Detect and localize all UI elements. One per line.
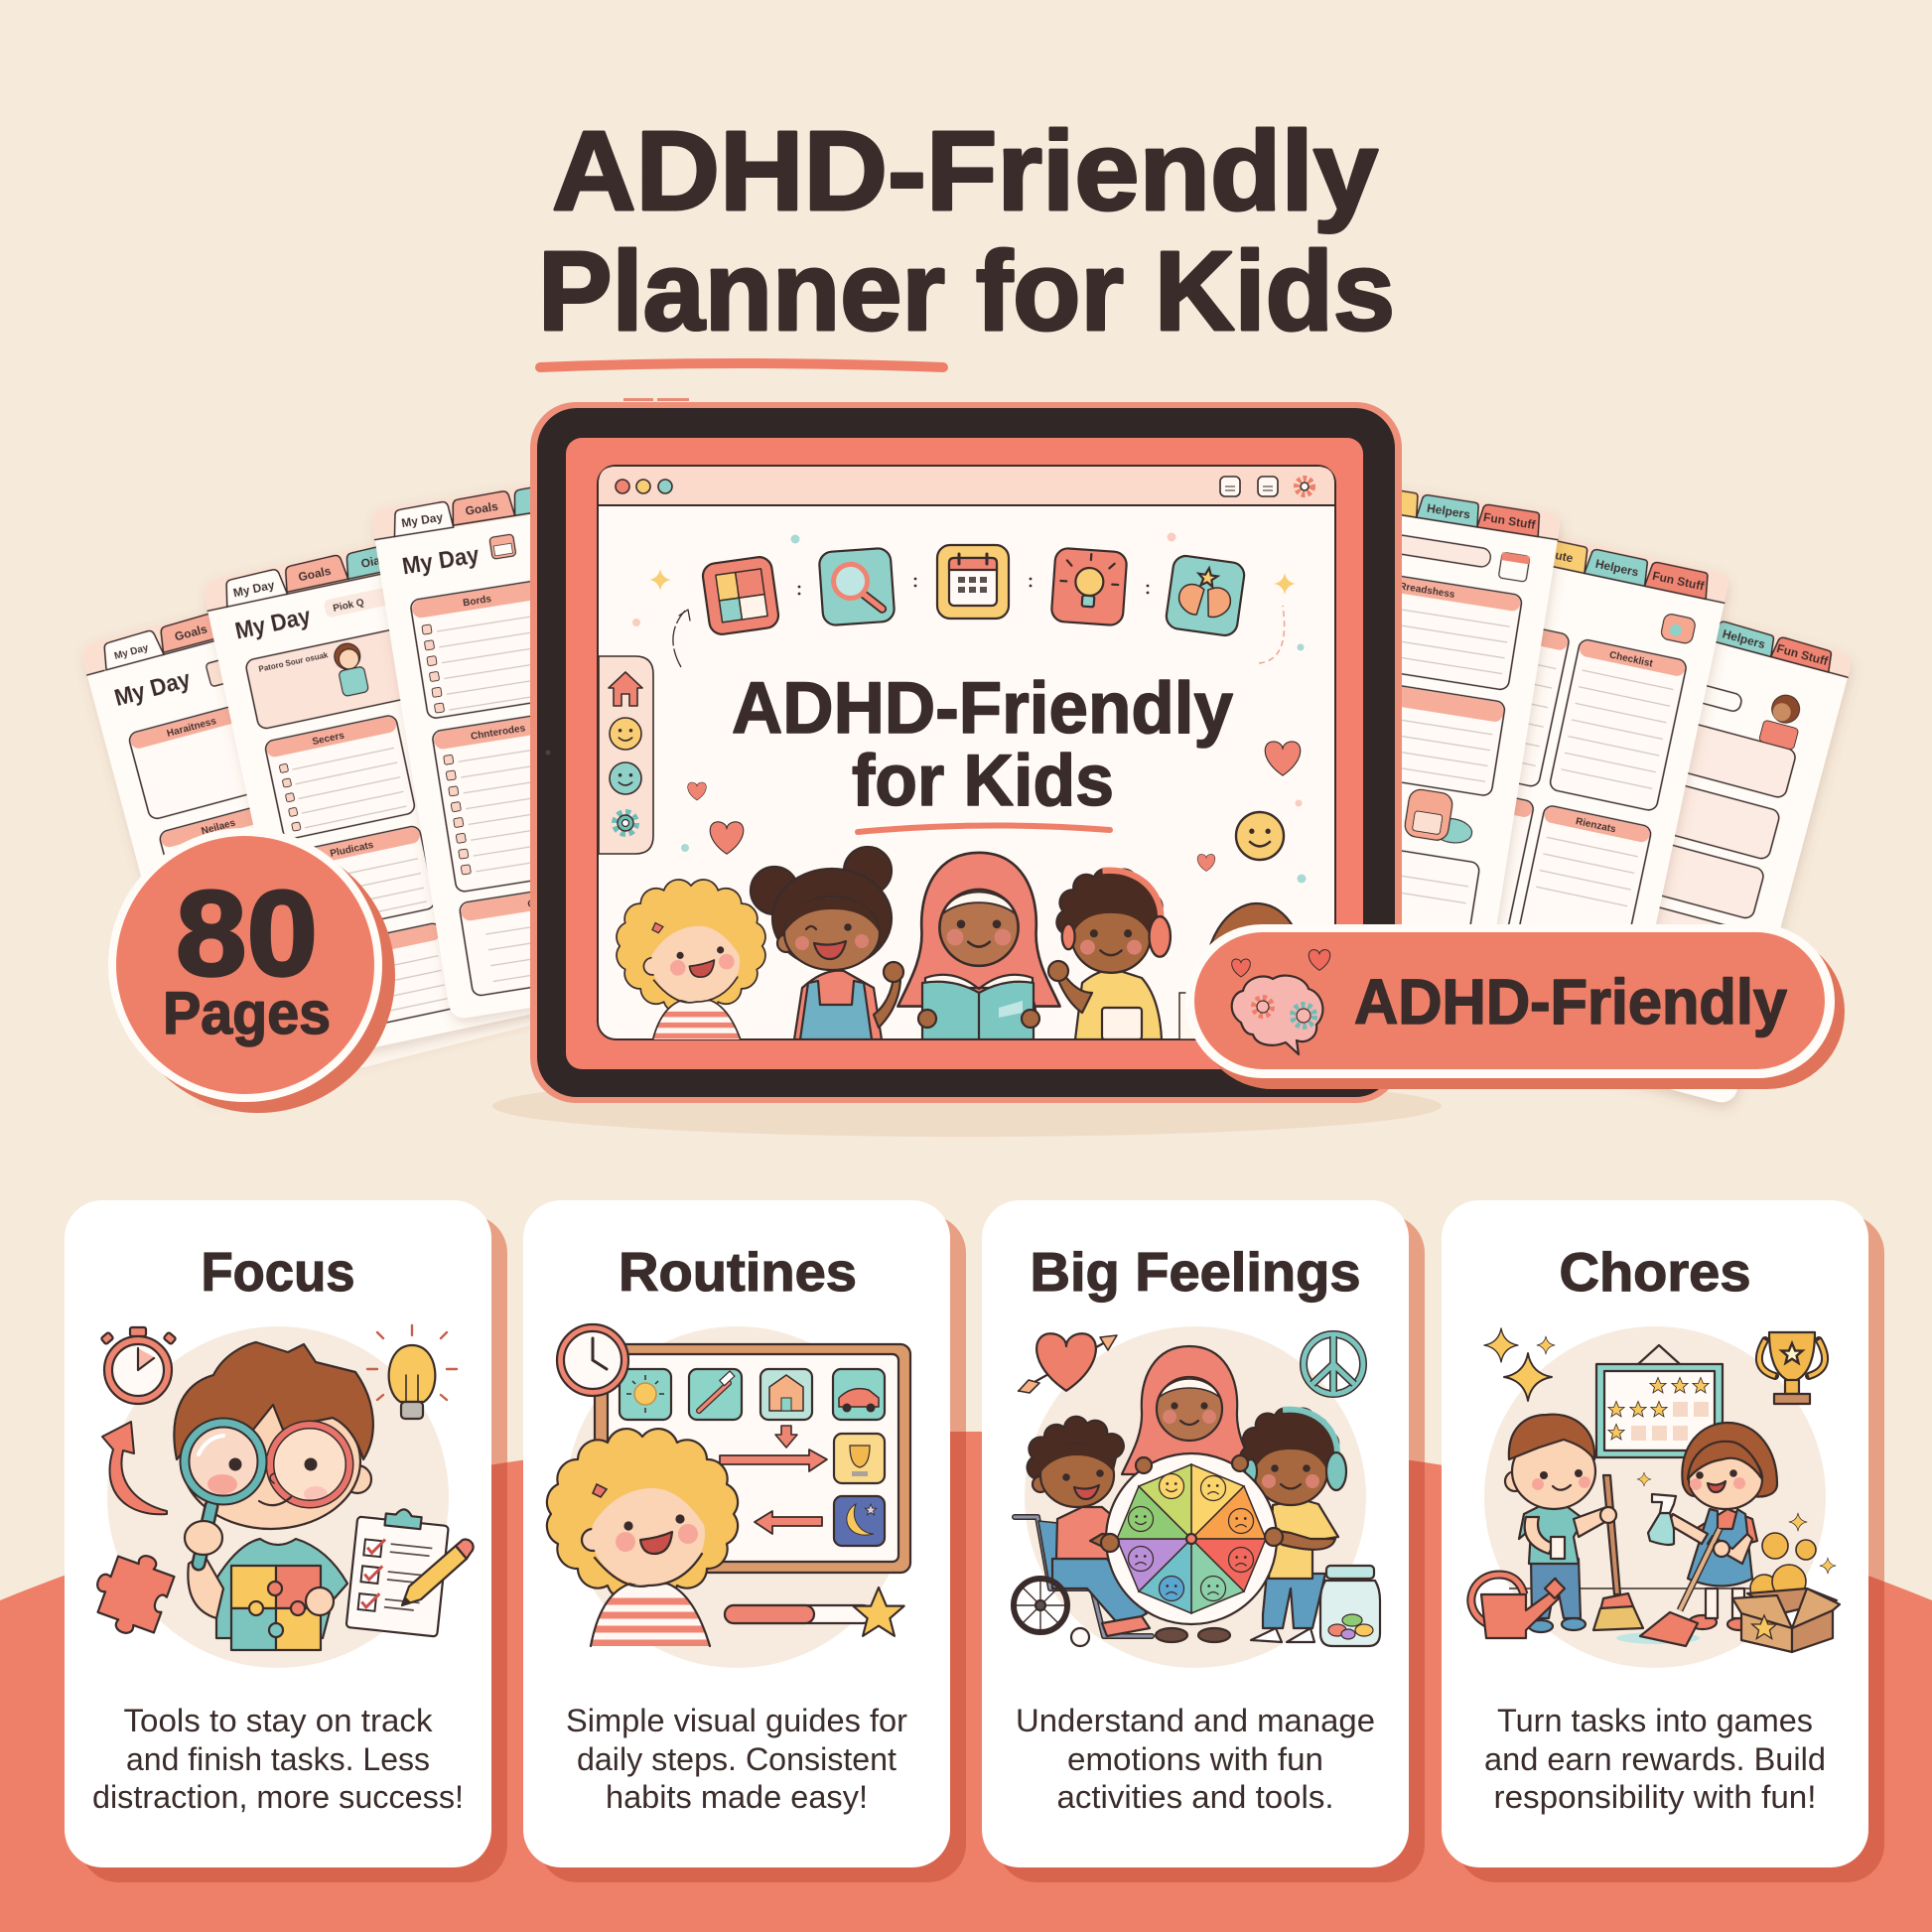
- planner page: far right: Helpers: [1721, 626, 1767, 651]
- icon: puzzle piece: [84, 1543, 178, 1642]
- description: responsibility with fun!: [1493, 1779, 1817, 1815]
- planner page: far left: My Day: [113, 642, 150, 662]
- planner page: middle left: Pludicats: [330, 840, 375, 860]
- planner page: middle right: Rienzats: [1575, 816, 1617, 836]
- pencil: [402, 1539, 474, 1605]
- badge: ADHD-Friendly pill: ADHD-Friendly: [1354, 966, 1787, 1037]
- sticker: [1660, 613, 1697, 644]
- planner page: far right: Fun Stuff: [1775, 641, 1831, 668]
- reward box: [1732, 1588, 1840, 1652]
- arrow: left: [755, 1511, 822, 1534]
- girl in hijab: [1122, 1346, 1257, 1474]
- icon: wall clock: [557, 1324, 628, 1396]
- badge: ADHD-Friendly pill: [1185, 924, 1845, 1089]
- planner page: middle left: My Day: [232, 603, 314, 645]
- coins: [1750, 1533, 1816, 1602]
- window dots: [616, 480, 672, 493]
- description: activities and tools.: [1056, 1779, 1334, 1815]
- schedule board: [595, 1344, 910, 1573]
- icon: peace sign: [1304, 1334, 1363, 1394]
- kid: curly girl: [617, 880, 765, 1049]
- kid on page: [332, 640, 369, 697]
- calendar sticker: [1498, 552, 1530, 582]
- page stack edge: [298, 983, 541, 1084]
- planner page: near left: Goals: [465, 499, 499, 518]
- icon tile: magnifier: [819, 548, 895, 625]
- tablet buttons: [623, 398, 689, 401]
- window title bar: [599, 467, 1334, 505]
- icon tile: butterfly: [1165, 554, 1246, 637]
- description: distraction, more success!: [92, 1779, 464, 1815]
- magnifier: [199, 1506, 211, 1564]
- icon: smile yellow: [610, 718, 641, 750]
- icon: home: [609, 672, 642, 706]
- planner page: middle right: Tsute: [1541, 545, 1575, 566]
- planner page: far right: [1446, 578, 1854, 1106]
- planner page: near left: Chnterodes: [470, 723, 526, 743]
- planner page: near left: [370, 473, 686, 1021]
- card heading: Chores: [1559, 1241, 1751, 1303]
- kid: boy with headphones: [1048, 869, 1171, 1039]
- girl with spray bottle and dustpan: [1640, 1423, 1777, 1646]
- tile: toothbrush: [689, 1369, 742, 1420]
- kid: partly hidden: [1178, 901, 1293, 1038]
- planner page: middle right: [1336, 512, 1730, 1059]
- decorative tablet sparkles and dots: [649, 569, 1296, 595]
- icon: heart with arrow: [1019, 1333, 1117, 1393]
- card: Chores: [1442, 1200, 1884, 1882]
- watering can: [1471, 1575, 1565, 1638]
- boy with magnifier: [174, 1342, 373, 1638]
- badge: 80 pages: [108, 828, 395, 1113]
- planner page: middle left: Oiaat: [359, 551, 392, 571]
- hearts and smiley: [688, 742, 1301, 872]
- left boy in wheelchair: [1014, 1417, 1152, 1646]
- illustration backdrop: [1025, 1326, 1366, 1668]
- description: and earn rewards. Build: [1484, 1741, 1826, 1777]
- planner page: middle left: Goals: [297, 564, 333, 584]
- icon: light bulb: [367, 1325, 457, 1419]
- app window: [598, 466, 1335, 1039]
- planner page: near left: Bords: [463, 594, 492, 609]
- planner page: middle left: Secers: [312, 731, 345, 748]
- planner page: far left: My Day: [111, 666, 194, 712]
- description: [92, 1703, 464, 1815]
- right boy body: [1240, 1408, 1346, 1642]
- kid: girl with buns: [751, 847, 903, 1039]
- planner page: near left: Chode: [527, 895, 560, 910]
- hands on wheel: [1101, 1455, 1283, 1552]
- icon: smile teal: [610, 762, 641, 794]
- girl feet: [1156, 1628, 1230, 1642]
- description: daily steps. Consistent: [577, 1741, 897, 1777]
- planner page: near left: My Day: [400, 510, 444, 530]
- planner page: middle left: My Day: [232, 578, 276, 600]
- icon tile: calendar: [937, 545, 1009, 619]
- planner page: middle right: Checklist: [1608, 650, 1654, 670]
- arrow: down: [775, 1426, 797, 1448]
- progress bar and star: [725, 1587, 904, 1636]
- planner page: far left: Haraitness: [166, 716, 218, 740]
- card heading: Focus: [201, 1241, 355, 1303]
- icon: curved arrow: [102, 1422, 167, 1514]
- arrow: right: [720, 1449, 827, 1471]
- smiley: [1236, 812, 1284, 860]
- tablet heading underline: [858, 825, 1110, 832]
- floor line: [1509, 1587, 1767, 1589]
- broom handle and dustpan: [1680, 1529, 1720, 1610]
- card: Big Feelings: [982, 1200, 1425, 1882]
- planner page: near right: [1223, 474, 1562, 1043]
- salmon wave: [0, 1432, 1932, 1932]
- planner page: far left: [79, 525, 652, 1102]
- icon: trophy: [1759, 1332, 1825, 1404]
- emotion wheel: [1106, 1453, 1277, 1624]
- planner page: near right: Helpers: [1426, 501, 1471, 522]
- icon: brain: [1232, 950, 1330, 1054]
- illustration backdrop: [1484, 1326, 1826, 1668]
- icon: gear: [615, 812, 636, 834]
- planner page: near right: Rreadshess: [1398, 581, 1456, 601]
- description: habits made easy!: [606, 1779, 868, 1815]
- tablet: for Kids: [852, 741, 1114, 821]
- boy with broom: [1505, 1415, 1643, 1632]
- planner page: middle left: Patoro Sour osuak: [258, 650, 330, 674]
- curly girl: [547, 1429, 738, 1646]
- ground shadow: [492, 1075, 1442, 1137]
- splash: [1616, 1632, 1700, 1644]
- card: Focus: [65, 1200, 507, 1882]
- description: Turn tasks into games: [1497, 1703, 1813, 1738]
- planner page: far left: Neilaes: [201, 818, 237, 837]
- hand: [306, 1587, 334, 1615]
- spray bottle: [1648, 1513, 1674, 1545]
- illustration backdrop: [566, 1326, 907, 1668]
- backpack sticker: [1376, 783, 1477, 846]
- tablet heading: ADHD-Friendly: [732, 668, 1233, 749]
- planner page: middle right: Helpers: [1594, 557, 1640, 580]
- description: Simple visual guides for: [566, 1703, 907, 1738]
- title: [538, 108, 1395, 353]
- sticker chart: [1596, 1345, 1723, 1457]
- card heading: Big Feelings: [1031, 1241, 1360, 1303]
- card: Routines: [523, 1200, 966, 1882]
- planner page: middle left: [202, 511, 633, 1062]
- tablet: [530, 398, 1402, 1103]
- tile: school: [760, 1369, 812, 1420]
- description: emotions with fun: [1067, 1741, 1323, 1777]
- tile: moon: [834, 1496, 885, 1546]
- jar of candy: [1320, 1566, 1380, 1646]
- description: and finish tasks. Less: [126, 1741, 430, 1777]
- tile: car: [833, 1369, 885, 1420]
- description: Understand and manage: [1016, 1703, 1375, 1738]
- planner page: far left: Goals: [173, 621, 209, 644]
- description: [1016, 1703, 1375, 1815]
- icon: stopwatch: [101, 1327, 176, 1404]
- title underline: [540, 363, 943, 367]
- kid on page: [1758, 691, 1807, 751]
- planner page: near left: My Day: [400, 542, 482, 580]
- clipboard: [346, 1505, 450, 1637]
- badge: 80 pages: 80: [176, 866, 318, 1001]
- title: ADHD-Friendly: [552, 108, 1378, 233]
- sparkles: [1484, 1328, 1836, 1574]
- description: [1484, 1703, 1826, 1815]
- description: [566, 1703, 907, 1815]
- puzzle square: [231, 1566, 321, 1650]
- card heading: Routines: [619, 1241, 857, 1303]
- description: Tools to stay on track: [123, 1703, 434, 1738]
- tile: sun: [620, 1369, 671, 1420]
- planner page: middle left: Piok Q: [332, 598, 365, 615]
- badge: 80 pages: Pages: [163, 980, 331, 1046]
- kid: hijab girl with book: [897, 853, 1060, 1039]
- side tab: [599, 656, 653, 854]
- tablet kids: [617, 847, 1311, 1049]
- illustration backdrop: [107, 1326, 449, 1668]
- planner page: middle right: Fun Stuff: [1651, 569, 1707, 594]
- tile: trophy: [834, 1434, 885, 1483]
- window tool icons: [1220, 477, 1312, 496]
- icon tile: bulb: [1051, 548, 1127, 625]
- planner page: near right: Fun Stuff: [1482, 510, 1537, 532]
- icon tile: puzzle: [701, 555, 780, 636]
- title: Planner for Kids: [538, 228, 1395, 353]
